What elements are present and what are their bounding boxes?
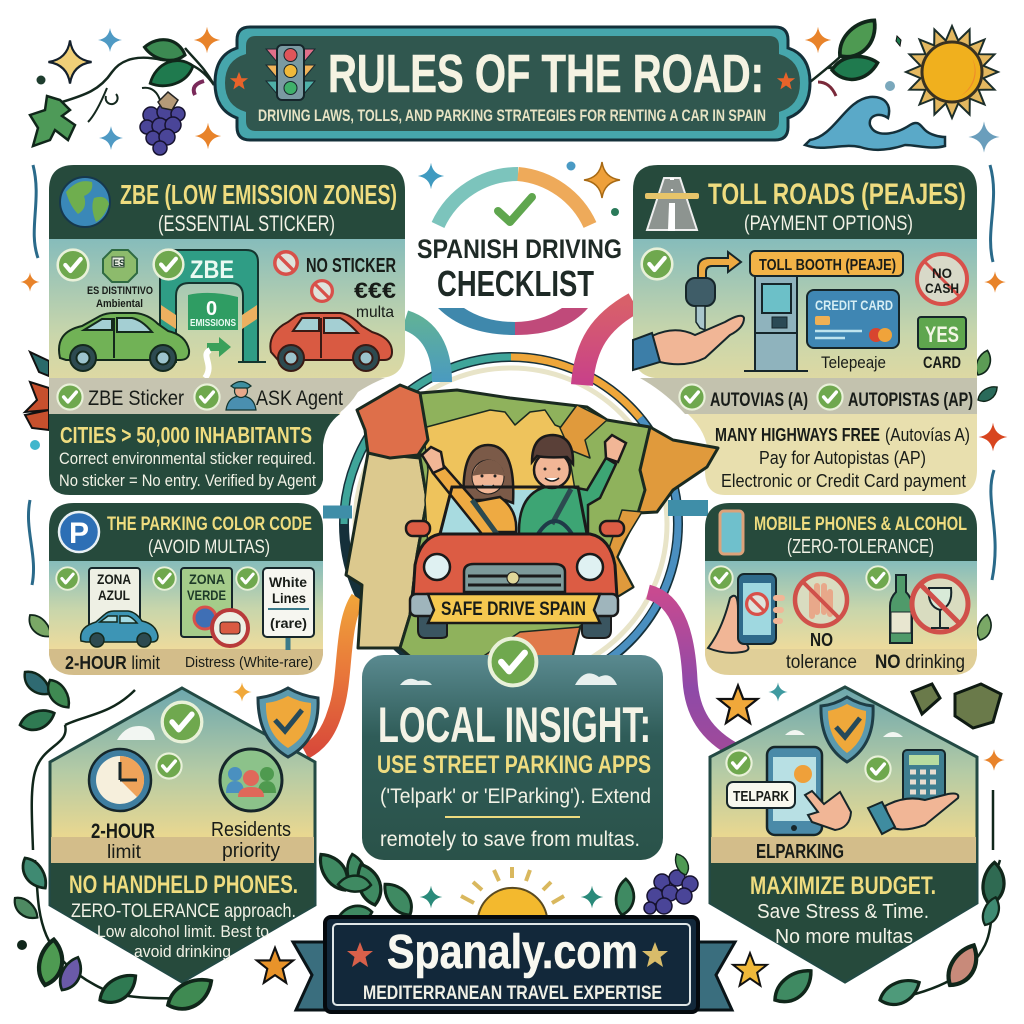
label: no tolerance (786, 630, 857, 673)
decoration: top-left vine, grapes and stars (20, 27, 221, 642)
footer banner (293, 917, 735, 1012)
icon: hand (633, 316, 744, 370)
panel: mobile phones and alcohol (705, 503, 977, 675)
icon: no parking (212, 610, 248, 646)
icon: no cash (917, 254, 967, 304)
plate (325, 917, 698, 1012)
car body (413, 534, 617, 597)
text block (750, 872, 936, 948)
progress arc (438, 174, 590, 225)
text: highways block: MANY HIGHWAYS FREE (715, 425, 880, 445)
icon: phone (767, 747, 822, 835)
banner: safe drive spain (428, 594, 600, 623)
label: no tolerance: NO (810, 630, 833, 650)
dots (566, 162, 619, 216)
no sticker warnings: NO STICKER (306, 255, 396, 277)
checklist emblem (417, 162, 622, 335)
text block (69, 871, 298, 961)
check (865, 756, 891, 782)
site name: Spanaly.com (387, 926, 638, 979)
icon: P (59, 512, 99, 552)
sun (906, 26, 998, 118)
check (726, 750, 752, 776)
text block: MAXIMIZE BUDGET. (750, 872, 936, 900)
toll booth sign (750, 251, 903, 276)
sign: zona verde (181, 568, 232, 637)
icon: traffic light (266, 45, 315, 100)
woman (422, 445, 516, 534)
icon: check (498, 197, 532, 222)
title banner (215, 27, 810, 140)
strip: highway types (640, 378, 977, 414)
icon: residents (220, 749, 282, 811)
sign: zona azul (89, 568, 140, 628)
illustration: couple in red car (406, 435, 626, 638)
sign: zona verde: ZONA (189, 571, 225, 587)
decoration: bottom vines, sun, grapes and stars (11, 666, 1011, 1013)
divider (445, 816, 580, 818)
subtitle: DRIVING LAWS, TOLLS, AND PARKING STRATEGIES FOR RENTING A CAR IN SPAIN (258, 106, 766, 125)
icon: small star (418, 163, 444, 189)
label: white rare: Distress (White-rare) (185, 654, 313, 671)
bottom arc (438, 308, 588, 335)
map circle with coloured rim (344, 357, 678, 691)
icon: bottle (890, 575, 912, 643)
icon: agent (226, 382, 256, 410)
icon: toll machine (744, 276, 808, 371)
no sticker warnings: €€€ (354, 278, 396, 303)
decoration: top-right vine, sun, wave and stars (805, 16, 1007, 642)
body line: ('Telpark' or 'ElParking'). Extend (380, 785, 651, 808)
panel: parking color code: (AVOID MULTAS) (148, 537, 270, 558)
panel: ZBE low emission zones (49, 165, 405, 495)
body line: remotely to save from multas. (380, 828, 640, 851)
panel: toll roads (633, 165, 977, 495)
mirror right (600, 521, 624, 536)
check (156, 753, 182, 779)
sign: white lines: Lines (272, 590, 306, 606)
gate: ZBE: 0 (206, 298, 217, 320)
panel: parking color code (49, 503, 323, 675)
check (58, 250, 88, 280)
panel: ZBE low emission zones: Ambiental (96, 298, 143, 310)
bottom-left vines (32, 690, 195, 1000)
heading: THE PARKING COLOR CODE (107, 514, 312, 535)
icon: sticker (103, 250, 137, 282)
title text: RULES OF THE ROAD: (328, 44, 764, 104)
icon: credit card (807, 290, 899, 348)
windshield (440, 490, 587, 534)
strip: sticker and agent: ZBE Sticker (88, 387, 184, 410)
ivy leaf (30, 96, 75, 146)
text: cities block: Correct environmental sticker required. (59, 449, 316, 468)
icon: no cash: NO (932, 265, 952, 281)
no sticker warnings (275, 252, 396, 321)
labels: 2-HOUR (91, 820, 155, 843)
icon: arrow and key (686, 252, 741, 330)
ribbon tails (293, 942, 735, 1010)
tag: Telpark (727, 782, 795, 808)
icon: no wine (912, 576, 968, 632)
sign: zona azul: ZONA (97, 571, 131, 587)
label: no drinking: NO drinking (875, 652, 965, 673)
check (153, 567, 176, 590)
icon: blue car (81, 611, 158, 647)
check (866, 566, 890, 590)
labels: limit (107, 842, 142, 863)
panel: local insight (362, 639, 663, 860)
mirrors (406, 521, 430, 536)
icon: calculator (903, 750, 945, 802)
icon: credit card: CREDIT CARD (815, 297, 893, 313)
leaves beside sun (317, 848, 640, 924)
check (709, 566, 733, 590)
yes card badge: CARD (923, 353, 961, 372)
text: highways block: Pay for Autopistas (AP) (759, 448, 926, 468)
wheels (418, 615, 611, 638)
text block: No more multas (775, 926, 913, 948)
text: cities block: No sticker = No entry. Verified by Agent (59, 471, 316, 490)
banner: safe drive spain: SAFE DRIVE SPAIN (441, 599, 586, 620)
sticker label: ES DISTINTIVO (87, 285, 153, 297)
right side ornaments (718, 686, 758, 723)
sign: zona azul: AZUL (98, 587, 130, 603)
text block: ZERO-TOLERANCE approach. (71, 901, 296, 922)
headlights (424, 554, 450, 580)
clouds (785, 730, 903, 737)
no sticker warnings: multa (356, 304, 394, 321)
sign: white lines (263, 568, 314, 650)
text: cities block (49, 414, 340, 495)
heading: SPANISH DRIVING (417, 234, 622, 264)
wave (805, 97, 945, 150)
check (642, 249, 672, 279)
check (490, 639, 536, 685)
icon: green car (59, 313, 189, 371)
labels: priority (222, 840, 280, 862)
strip: highway types: AUTOVIAS (A) (710, 390, 808, 411)
heading: ZBE (LOW EMISSION ZONES) (120, 179, 397, 210)
sign: zona verde: VERDE (187, 587, 226, 603)
text: highways block (688, 414, 977, 495)
icon: phone in hand (708, 574, 782, 653)
gate: ZBE: ZBE (190, 256, 234, 284)
text block: avoid drinking (134, 942, 231, 961)
panel: ZBE low emission zones: (ESSENTIAL STICKER) (158, 211, 335, 236)
connector roads between panels and map (305, 303, 738, 752)
heading: LOCAL INSIGHT: (378, 697, 651, 753)
icon: no cash: CASH (925, 280, 959, 296)
strip: highway types: AUTOPISTAS (AP) (848, 390, 973, 411)
text block: Low alcohol limit. Best to (97, 922, 269, 941)
panel: maximize budget hexagon (710, 687, 977, 982)
cloud (117, 726, 155, 740)
labels (91, 819, 291, 863)
panel: toll roads: (PAYMENT OPTIONS) (744, 212, 913, 235)
man (519, 435, 626, 534)
icon: clock (89, 749, 151, 811)
gate: ZBE: EMISSIONS (190, 318, 236, 329)
labels: Residents (211, 819, 291, 841)
stars (347, 942, 373, 967)
bumper (410, 594, 618, 616)
label: Telepeaje (821, 353, 886, 372)
icon: star (584, 162, 620, 198)
grapes (644, 870, 698, 914)
heading line 2: CHECKLIST (437, 263, 594, 304)
text: highways block: Electronic or Credit Card payment (721, 471, 966, 491)
shield (821, 697, 873, 762)
label: ElParking: ELPARKING (756, 841, 844, 863)
subheading: USE STREET PARKING APPS (377, 751, 651, 779)
icon: pointing hand (805, 791, 851, 830)
icon: P: P (69, 517, 89, 550)
headlight right (577, 554, 603, 580)
toll booth sign: TOLL BOOTH (PEAJE) (759, 257, 896, 274)
icon: sticker: ES (113, 258, 125, 268)
sign: white lines: (rare) (270, 615, 307, 631)
label: 2-hour limit: 2-HOUR limit (65, 653, 160, 673)
text: highways block: (Autovías A) (885, 425, 970, 445)
strip: sticker and agent: ASK Agent (256, 387, 343, 410)
grille (464, 564, 565, 592)
map of Spain (346, 385, 718, 665)
heading: MOBILE PHONES & ALCOHOL (754, 514, 967, 535)
strip: sticker and agent (49, 378, 385, 414)
check (236, 567, 259, 590)
icon: road (645, 178, 699, 230)
icon: phone (720, 511, 743, 554)
text block: Save Stress & Time. (757, 901, 929, 923)
icon: open hand (868, 794, 958, 834)
icon: red car (270, 313, 392, 371)
left margin decorations (33, 165, 38, 258)
icon: globe (60, 177, 110, 227)
icon: no hand (795, 574, 847, 626)
label: no tolerance: tolerance (786, 652, 857, 673)
yes card badge: YES (925, 322, 959, 347)
panel: two-hour limit and phones hexagon (50, 688, 318, 982)
gate: ZBE (160, 250, 266, 378)
check (154, 250, 183, 279)
yes card badge (918, 317, 966, 372)
sign: white lines: White (269, 574, 307, 590)
text block: NO HANDHELD PHONES. (69, 871, 298, 899)
car roof and pillars (440, 487, 587, 534)
check (162, 702, 202, 742)
rising sun (461, 867, 564, 917)
tag: Telpark: TELPARK (733, 788, 789, 805)
check (56, 567, 79, 590)
grapes (140, 104, 185, 155)
shield (258, 688, 318, 757)
panel: mobile phones and alcohol: (ZERO-TOLERANCE) (787, 536, 934, 558)
text: cities block: CITIES > 50,000 INHABITANTS (60, 422, 312, 448)
tagline: MEDITERRANEAN TRAVEL EXPERTISE (363, 983, 662, 1004)
